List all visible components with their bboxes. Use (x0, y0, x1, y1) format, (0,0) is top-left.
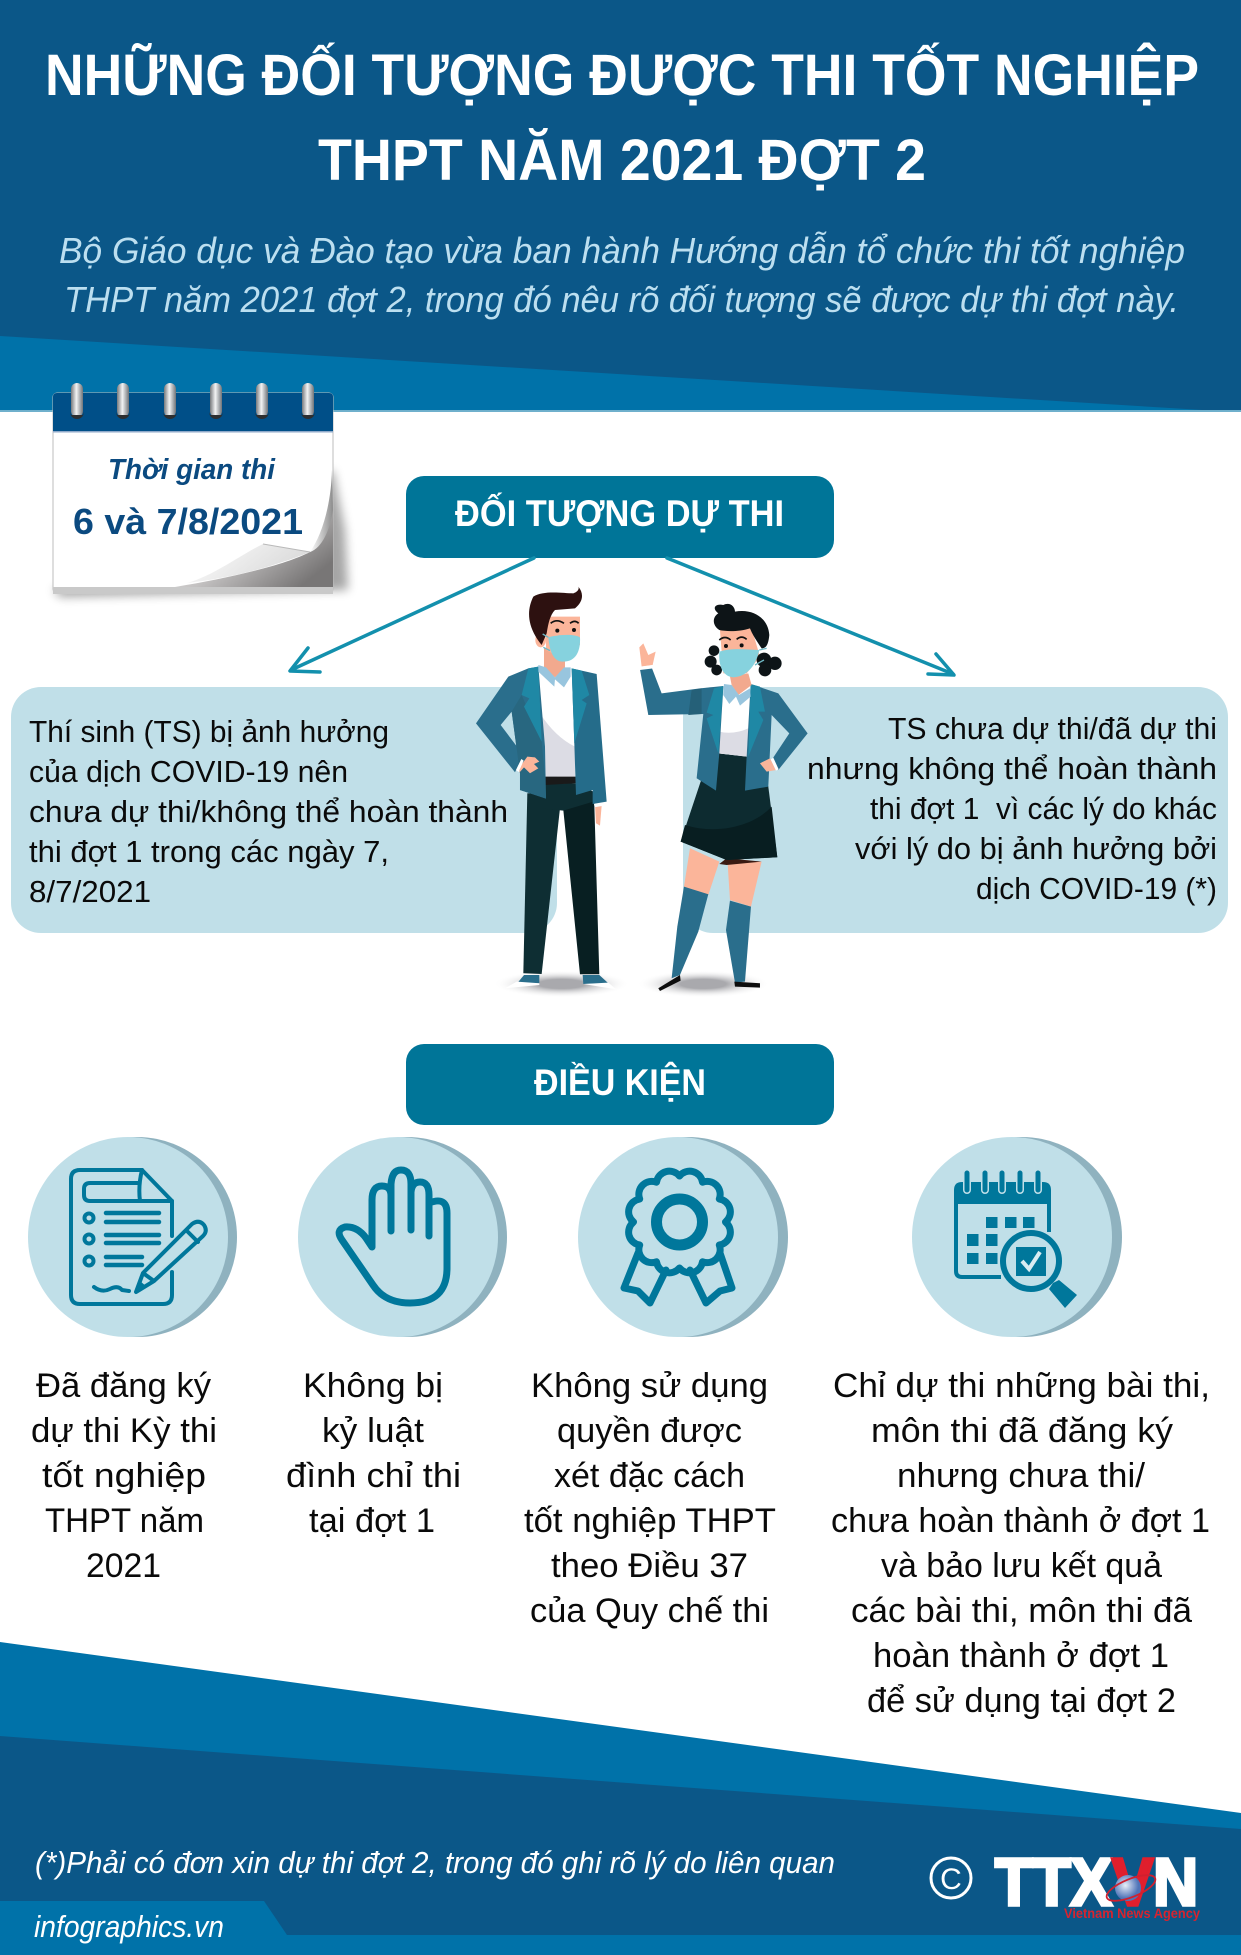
title (45, 43, 1199, 193)
heading: target group (406, 476, 834, 558)
panel: right target group: TS chưa dự thi/đã dự thi (888, 711, 1217, 746)
text: condition 4: các bài thi, môn thi đã (851, 1592, 1193, 1630)
text: condition 3: xét đặc cách (554, 1457, 745, 1495)
icon: calendar with magnifier (912, 1137, 1122, 1337)
arrow: to left group (290, 558, 534, 672)
text: condition 2 (286, 1367, 461, 1540)
text: condition 1: Đã đăng ký (36, 1367, 212, 1405)
text: condition 4: để sử dụng tại đợt 2 (867, 1682, 1176, 1720)
text: condition 4: hoàn thành ở đợt 1 (873, 1637, 1169, 1675)
panel: right target group: với lý do bị ảnh hưởng bởi (855, 831, 1217, 866)
footer background (0, 1642, 1241, 1955)
arrow: to right group (667, 558, 954, 675)
subtitle (59, 230, 1185, 320)
panel: left target group: Thí sinh (TS) bị ảnh hưởng (29, 714, 389, 749)
subtitle: Bộ Giáo dục và Đào tạo vừa ban hành Hướng dẫn tổ chức thi tốt nghiệp (59, 230, 1185, 271)
footnote: (*)Phải có đơn xin dự thi đợt 2, trong đó ghi rõ lý do liên quan (35, 1845, 835, 1880)
calendar: exam dates: 6 và 7/8/2021 (73, 501, 303, 542)
logo: TTXVN: C (940, 1863, 962, 1896)
text: condition 3: Không sử dụng (531, 1367, 768, 1405)
panel: right target group: nhưng không thể hoàn thành (807, 751, 1217, 786)
source site: infographics.vn (34, 1909, 224, 1944)
logo: TTXVN: TTXVN (995, 1845, 1198, 1920)
text: condition 4: môn thi đã đăng ký (871, 1412, 1174, 1450)
heading: conditions (406, 1044, 834, 1125)
text: condition 2: đình chỉ thi (286, 1457, 461, 1495)
calendar: exam dates: Thời gian thi (108, 454, 276, 486)
icon: rosette award (578, 1137, 788, 1337)
text: condition 4: nhưng chưa thi/ (897, 1457, 1145, 1495)
calendar: exam dates (53, 383, 348, 597)
text: condition 2: Không bị (303, 1367, 443, 1405)
text: condition 1: THPT năm (45, 1502, 204, 1540)
title: THPT NĂM 2021 ĐỢT 2 (318, 128, 926, 193)
illustration: female student (638, 604, 808, 997)
text: condition 1: dự thi Kỳ thi (31, 1412, 217, 1450)
heading: conditions: ĐIỀU KIỆN (534, 1061, 706, 1103)
text: condition 4: và bảo lưu kết quả (881, 1547, 1163, 1585)
heading: target group: ĐỐI TƯỢNG DỰ THI (455, 492, 784, 534)
panel: right target group: dịch COVID-19 (*) (976, 871, 1217, 906)
panel: right target group: thi đợt 1 vì các lý do khác (870, 791, 1217, 826)
panel: left target group: chưa dự thi/không thể hoàn thành (29, 794, 508, 829)
text: condition 4: chưa hoàn thành ở đợt 1 (831, 1502, 1210, 1540)
panel: left target group: 8/7/2021 (29, 874, 151, 909)
panel: left target group: thi đợt 1 trong các ngày 7, (29, 834, 389, 869)
text: condition 2: kỷ luật (322, 1412, 424, 1450)
text: condition 3: quyền được (557, 1412, 742, 1450)
text: condition 3: theo Điều 37 (551, 1547, 748, 1585)
panel: left target group: của dịch COVID-19 nên (29, 754, 348, 789)
text: condition 2: tại đợt 1 (309, 1502, 435, 1540)
text: condition 1: 2021 (86, 1547, 161, 1585)
subtitle: THPT năm 2021 đợt 2, trong đó nêu rõ đối tượng sẽ được dự thi đợt này. (64, 279, 1179, 320)
icon: registration form (28, 1137, 237, 1337)
text: condition 1: tốt nghiệp (42, 1457, 206, 1495)
text: condition 1 (31, 1367, 217, 1585)
panel: left target group (11, 687, 557, 933)
illustration: male student (476, 587, 628, 997)
header background (0, 0, 1241, 412)
text: condition 3: của Quy chế thi (530, 1592, 769, 1630)
text: condition 4 (831, 1367, 1210, 1720)
text: condition 3 (524, 1367, 776, 1630)
text: condition 4: Chỉ dự thi những bài thi, (833, 1367, 1210, 1405)
panel: right target group (683, 687, 1228, 933)
icon: raised hand (298, 1137, 507, 1337)
text: condition 3: tốt nghiệp THPT (524, 1502, 776, 1540)
logo: TTXVN: Vietnam News Agency (1064, 1905, 1200, 1921)
